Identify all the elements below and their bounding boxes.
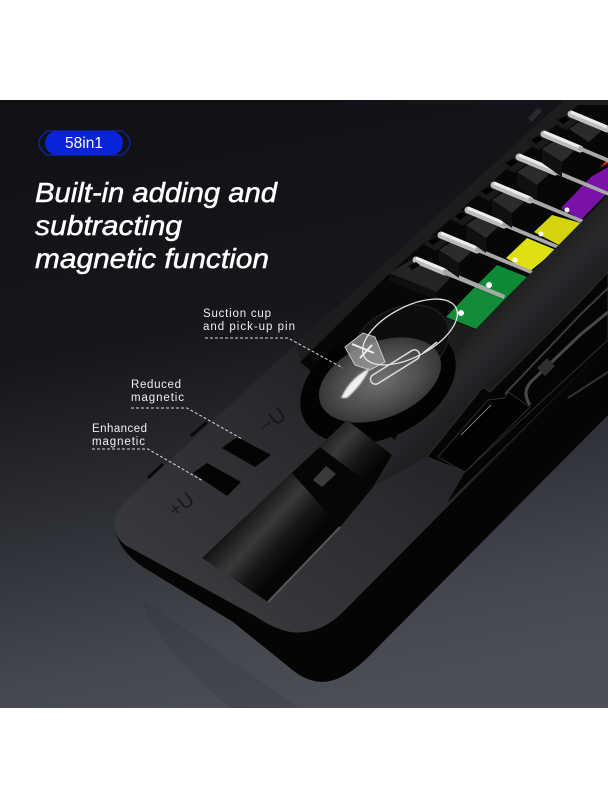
bit: 1: [389, 258, 505, 300]
edge mark: [148, 422, 207, 478]
cup dome: [306, 321, 454, 439]
callout: enhanced magnetic: [92, 423, 203, 481]
title: Built-in adding and: [35, 177, 278, 208]
callout: reduced magnetic: [131, 379, 242, 439]
trough cylinder: [202, 420, 392, 602]
bit: 2: [421, 233, 533, 278]
badge: 58in1: 58in1: [65, 135, 103, 152]
minus symbol engraved: −U: [255, 403, 291, 438]
inner tray floor: [300, 105, 608, 440]
lower black lip: [447, 330, 608, 503]
grey bar beneath strips: [373, 195, 608, 487]
dome highlight: [341, 368, 370, 398]
clear cap: [345, 333, 385, 370]
bit: 3: [448, 208, 560, 253]
title: subtracting: [35, 210, 182, 241]
colour strips: [446, 158, 608, 329]
callout: enhanced magnetic: magnetic: [92, 436, 145, 448]
yellow strip: [506, 238, 556, 272]
case side: [115, 280, 608, 682]
bit: 4: [474, 183, 586, 228]
wire loop: [352, 286, 468, 378]
cup well: [281, 300, 475, 468]
yellow strip upper: [534, 215, 581, 245]
notch: [292, 447, 373, 527]
slot: reduced: [222, 437, 271, 467]
pick-up pin: [369, 342, 437, 386]
callout: enhanced magnetic: Enhanced: [92, 423, 147, 435]
red strip: [600, 158, 608, 168]
green strip P5: [446, 288, 504, 329]
bit: 5: [499, 155, 608, 200]
suction cup and pick-up pin: [281, 286, 475, 468]
badge: 58in1: [39, 131, 130, 155]
case top face: [115, 100, 608, 633]
magnet slots: [148, 422, 271, 496]
callout: suction cup and pick-up pin: and pick-up pin: [203, 321, 295, 333]
callout: reduced magnetic: Reduced: [131, 379, 181, 391]
plus symbol engraved: +U: [165, 489, 199, 522]
wall notch: [528, 108, 542, 122]
green strip T2: [474, 265, 527, 300]
callout: suction cup and pick-up pin: [203, 308, 343, 368]
slot: enhanced: [193, 463, 241, 496]
compartment: clips and tweezers: [427, 272, 608, 472]
purple strip: [561, 167, 608, 220]
title: [35, 177, 278, 274]
callout: suction cup and pick-up pin: Suction cup: [203, 308, 271, 320]
bit: 7: [551, 112, 607, 142]
background panel: [0, 100, 608, 708]
upper bowl ring: [337, 289, 463, 401]
callout: reduced magnetic: magnetic: [131, 392, 184, 404]
device: tool case: [115, 100, 608, 682]
title: magnetic function: [35, 243, 269, 274]
inner wall: [296, 100, 608, 440]
strip marks: [458, 208, 570, 316]
bit: 6: [524, 132, 608, 177]
device reflection: [143, 600, 300, 708]
